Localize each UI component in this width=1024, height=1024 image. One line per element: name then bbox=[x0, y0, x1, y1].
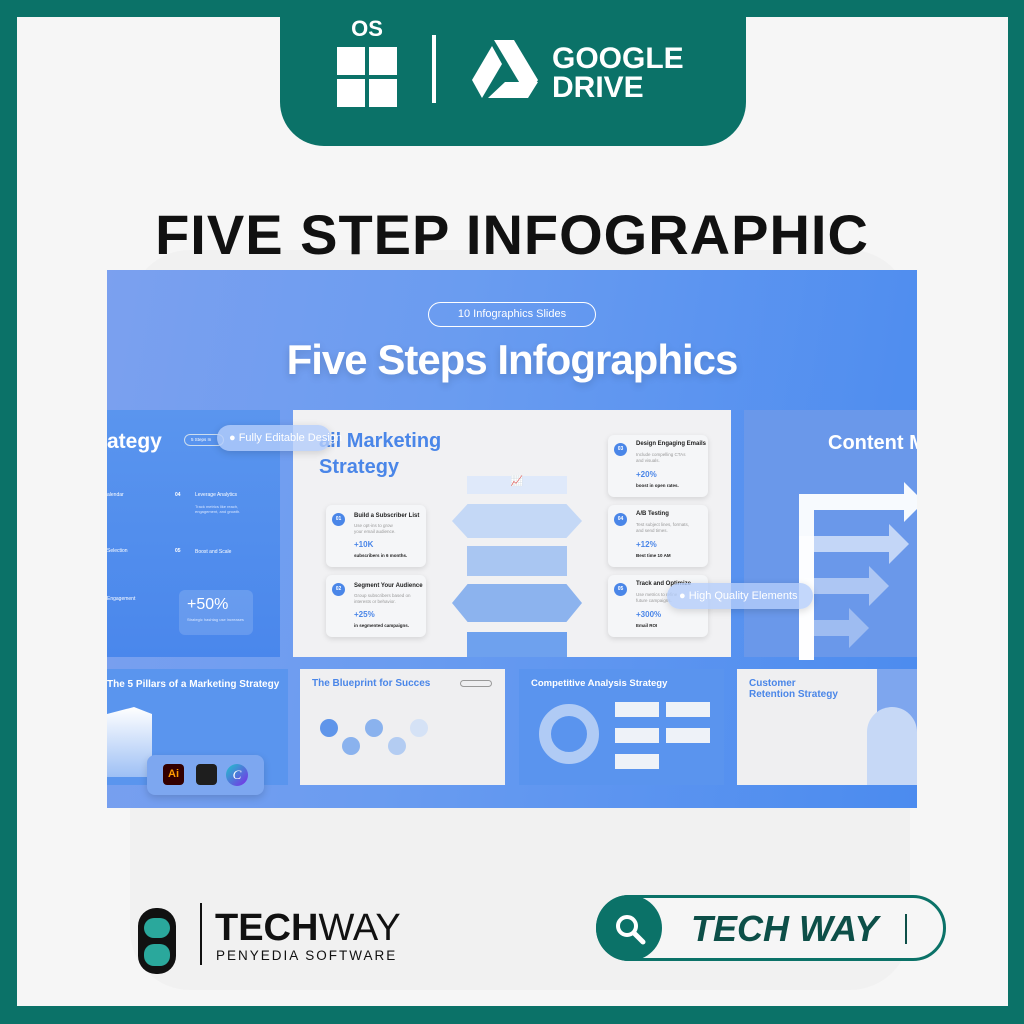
pill: fully editable: ● Fully Editable Design bbox=[229, 432, 342, 444]
slide: content bbox=[744, 410, 917, 657]
card 03: 03 bbox=[618, 446, 623, 452]
badge bbox=[428, 302, 596, 327]
slide: left strategy: 04 bbox=[175, 492, 181, 498]
toolbox: Ai figma canva bbox=[147, 755, 264, 795]
card 01: your email audience. bbox=[354, 529, 396, 534]
slide: competitive analysis: Competitive Analysis Strategy bbox=[531, 678, 667, 689]
slide: blueprint: The Blueprint for Succes bbox=[312, 678, 430, 689]
slide: email marketing bbox=[293, 410, 731, 657]
main preview panel bbox=[107, 270, 917, 808]
slide: left strategy: Leverage Analytics bbox=[195, 492, 237, 498]
slide: left strategy bbox=[107, 410, 280, 657]
card 05: Track and Optimize bbox=[636, 581, 691, 587]
toolbox: Ai figma canva: Ai bbox=[168, 768, 179, 780]
logo: techway bbox=[138, 903, 401, 974]
card 01: Build a Subscriber List bbox=[354, 513, 419, 519]
icon: robot bbox=[138, 908, 176, 974]
slide: blueprint bbox=[300, 669, 505, 785]
card 01: Use opt-ins to grow bbox=[354, 523, 393, 528]
funnel bbox=[452, 475, 582, 657]
search bar: tech way: TECH WAY bbox=[691, 908, 878, 949]
logo: techway: PENYEDIA SOFTWARE bbox=[216, 948, 397, 963]
google drive text: DRIVE bbox=[552, 71, 644, 104]
slide: left strategy: 05 bbox=[175, 548, 181, 554]
card 04: Best time 10 AM bbox=[636, 553, 671, 558]
card 02: interests or behavior. bbox=[354, 599, 396, 604]
slide: customer retention: Retention Strategy bbox=[749, 689, 838, 700]
card 04: +12% bbox=[636, 540, 657, 549]
funnel: 📈 bbox=[511, 476, 523, 487]
card 03: boost in open rates. bbox=[636, 483, 679, 488]
card 02: in segmented campaigns. bbox=[354, 623, 409, 628]
slide: customer retention bbox=[737, 669, 917, 785]
slide: left strategy: Boost and Scale bbox=[195, 549, 231, 555]
icon: google drive bbox=[472, 40, 538, 98]
slide: left strategy: engagement, and growth. bbox=[195, 509, 240, 514]
slide: left strategy: alendar bbox=[107, 492, 124, 498]
card 02: 02 bbox=[336, 586, 341, 592]
card 02 bbox=[326, 575, 426, 637]
title: FIVE STEP INFOGRAPHIC bbox=[155, 203, 869, 266]
heading: Five Steps Infographics bbox=[287, 336, 737, 383]
slide: left strategy: +50% bbox=[187, 596, 228, 613]
slide: competitive analysis bbox=[519, 669, 724, 785]
pill: high quality bbox=[667, 583, 813, 609]
slide: 5 pillars: The 5 Pillars of a Marketing Strategy bbox=[107, 679, 279, 690]
card 05 bbox=[608, 575, 708, 637]
pill: fully editable bbox=[217, 425, 331, 451]
search bar: tech way bbox=[596, 895, 946, 961]
google drive text bbox=[552, 42, 684, 104]
card 05: future campaigns. bbox=[636, 598, 672, 603]
icon: OS windows: OS bbox=[351, 16, 383, 41]
slide: left strategy: ategy bbox=[107, 430, 162, 453]
card 05: Email ROI bbox=[636, 623, 657, 628]
card 03: Design Engaging Emails bbox=[636, 441, 706, 447]
card 04: Test subject lines, formats, bbox=[636, 522, 689, 527]
badge: 10 Infographics Slides bbox=[458, 308, 566, 320]
card 05: Use metrics to refine bbox=[636, 592, 677, 597]
card 04: and send times. bbox=[636, 528, 668, 533]
card 05: +300% bbox=[636, 610, 661, 619]
google drive text: GOOGLE bbox=[552, 42, 684, 75]
card 05: 05 bbox=[618, 586, 623, 592]
slide: left strategy: Selection bbox=[107, 548, 128, 554]
slide: left strategy: 5 Steps In bbox=[191, 437, 211, 442]
slide: customer retention: Customer bbox=[749, 678, 796, 689]
card 03: and visuals. bbox=[636, 458, 660, 463]
card 02: Group subscribers based on bbox=[354, 593, 411, 598]
card 01: subscribers in 6 months. bbox=[354, 553, 407, 558]
toolbox: Ai figma canva: C bbox=[233, 767, 241, 782]
card 03 bbox=[608, 435, 708, 497]
icon: OS windows bbox=[337, 16, 397, 107]
background watermark bbox=[130, 250, 910, 990]
card 03: Include compelling CTAs bbox=[636, 452, 685, 457]
card 02: Segment Your Audience bbox=[354, 583, 423, 589]
card 01 bbox=[326, 505, 426, 567]
slide: left strategy: Engagement bbox=[107, 596, 135, 602]
slide: left strategy: Strategic hashtag use increases bbox=[187, 617, 244, 622]
card 04: 04 bbox=[618, 516, 623, 522]
slide: left strategy: Track metrics like reach, bbox=[195, 504, 238, 509]
slide: email marketing: ail Marketing bbox=[319, 430, 441, 452]
card 01: 01 bbox=[336, 516, 341, 522]
logo: techway: TECHWAY bbox=[215, 907, 401, 949]
card 01: +10K bbox=[354, 540, 373, 549]
card 03: +20% bbox=[636, 470, 657, 479]
header tab bbox=[280, 0, 746, 146]
card 04: A/B Testing bbox=[636, 511, 669, 517]
card 04 bbox=[608, 505, 708, 567]
slide: email marketing: Strategy bbox=[319, 456, 399, 478]
slide: 5 pillars bbox=[107, 669, 288, 785]
card 02: +25% bbox=[354, 610, 375, 619]
pill: high quality: ● High Quality Elements bbox=[679, 590, 798, 602]
